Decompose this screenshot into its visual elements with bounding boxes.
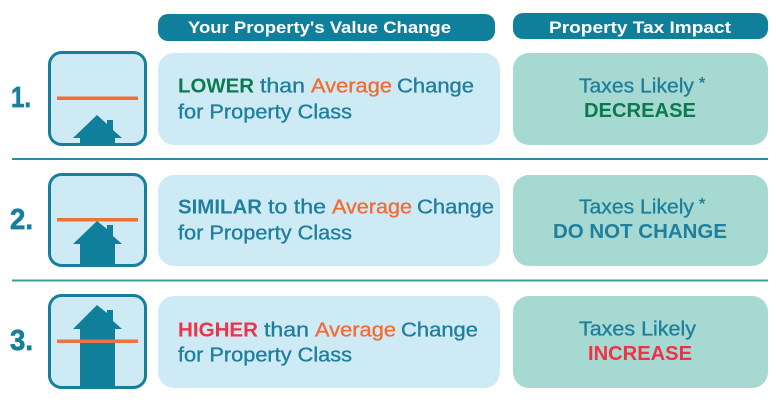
header: property tax impact: [513, 13, 768, 39]
panel: higher than average change: HIGHER: [178, 320, 259, 342]
icon: house below average line: [50, 52, 146, 144]
header: your property's value change: Your Property's Value Change: [188, 18, 451, 37]
panel: taxes likely do not change: [513, 175, 768, 266]
icon: house at average line: [50, 174, 146, 266]
panel: similar to the average change: Average: [332, 196, 412, 218]
panel: lower than average change: [158, 53, 500, 145]
number 3: 3.: [10, 325, 33, 357]
panel: higher than average change: Average: [315, 318, 396, 342]
header: property tax impact: Property Tax Impact: [549, 18, 731, 37]
panel: similar to the average change: SIMILAR: [178, 196, 263, 218]
panel: taxes likely do not change: *: [699, 196, 706, 213]
number 1: 1.: [11, 82, 31, 114]
panel: taxes likely decrease: DECREASE: [584, 100, 696, 122]
panel: taxes likely do not change: Taxes Likely: [579, 196, 695, 218]
row 2: [10, 174, 768, 266]
panel: lower than average change: than: [260, 74, 305, 98]
panel: higher than average change: for Property Class: [178, 344, 352, 366]
row 3: [10, 296, 768, 388]
icon: house above average line: [50, 296, 146, 388]
panel: similar to the average change: Change: [417, 196, 494, 218]
row 1: [11, 52, 768, 145]
panel: lower than average change: LOWER: [178, 76, 255, 98]
panel: higher than average change: than: [264, 318, 309, 342]
panel: taxes likely decrease: [513, 53, 768, 145]
panel: taxes likely increase: INCREASE: [588, 343, 692, 365]
panel: higher than average change: Change: [401, 318, 478, 342]
panel: taxes likely increase: Taxes Likely: [579, 318, 697, 340]
panel: taxes likely decrease: *: [699, 75, 706, 92]
panel: lower than average change: Change: [397, 74, 474, 98]
panel: similar to the average change: [158, 175, 500, 266]
panel: lower than average change: Average: [311, 74, 392, 98]
panel: lower than average change: for Property Class: [178, 100, 352, 124]
panel: similar to the average change: for Property Class: [178, 222, 352, 244]
panel: higher than average change: [158, 296, 500, 388]
panel: taxes likely do not change: DO NOT CHANGE: [553, 221, 727, 243]
panel: taxes likely decrease: Taxes Likely: [579, 74, 695, 98]
panel: similar to the average change: to the: [268, 196, 326, 218]
number 2: 2.: [10, 204, 33, 236]
header: your property's value change: [158, 14, 495, 41]
panel: taxes likely increase: [513, 296, 768, 388]
